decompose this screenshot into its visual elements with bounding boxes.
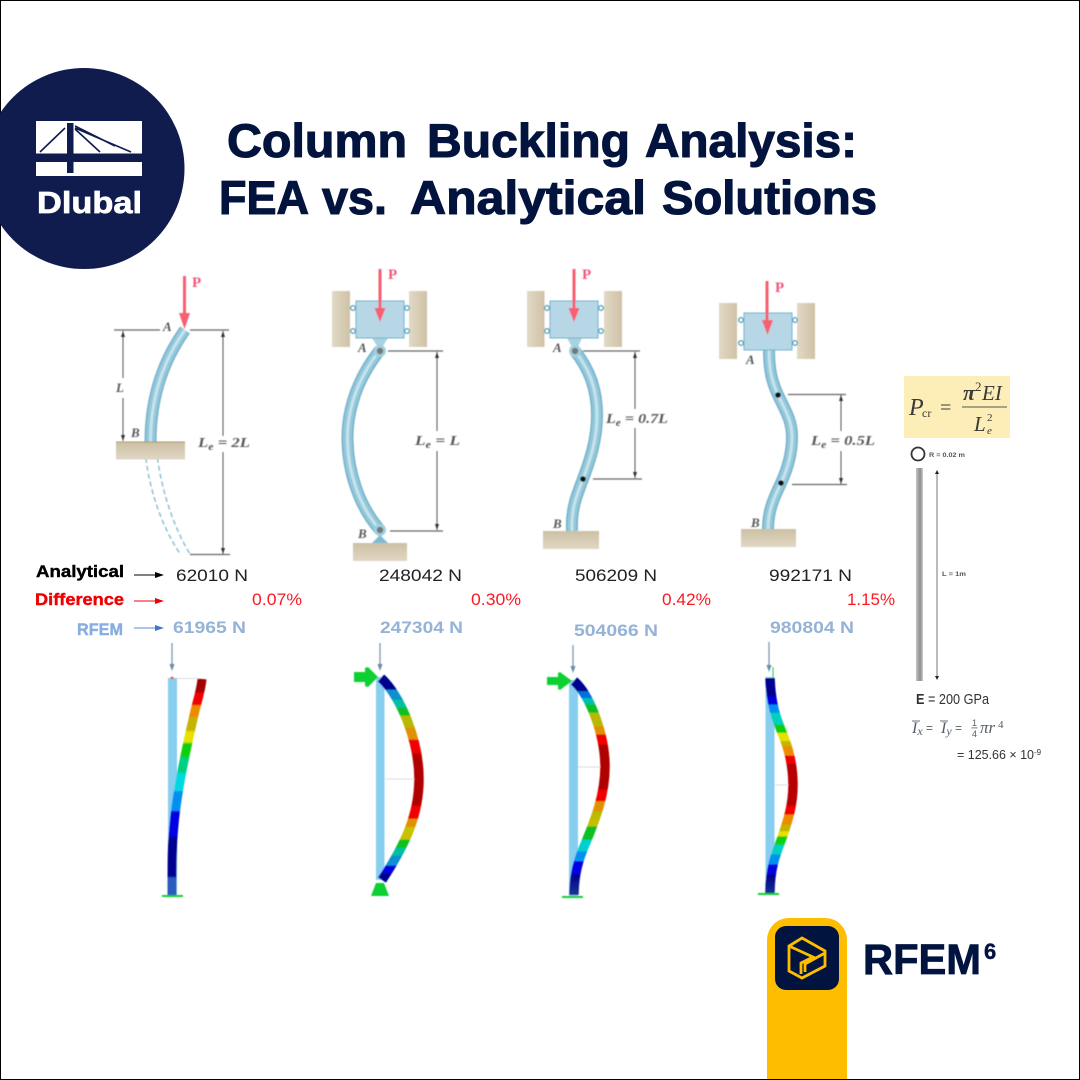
formula box: critical load: EI xyxy=(981,381,1003,405)
formula box: critical load: L xyxy=(973,412,986,436)
column cross-section and length sketch: L = 1m xyxy=(942,571,966,578)
formula box: critical load: 2 xyxy=(987,412,992,424)
diagram: column 3 pinned-fixed, Le = 0.7L: L xyxy=(606,412,615,427)
column cross-section and length sketch xyxy=(912,448,966,681)
diagram: column 4 fixed-fixed, Le = 0.5L: = 0.5L xyxy=(826,434,875,449)
title: vs. xyxy=(322,171,387,224)
diagram: column 2 pinned-pinned, Le = L xyxy=(332,267,460,561)
material properties xyxy=(911,691,1042,762)
diagram: column 1 free-fixed, Le = 2L: = 2L xyxy=(214,436,250,451)
material properties: y xyxy=(945,724,952,738)
material properties: I xyxy=(941,720,946,737)
formula box: critical load: e xyxy=(987,425,992,437)
title: Analysis: xyxy=(645,114,857,167)
row labels with arrows: RFEM xyxy=(77,620,123,639)
RFEM values xyxy=(173,618,854,640)
formula box: critical load: P xyxy=(908,395,924,421)
title xyxy=(219,114,877,224)
analytical values: 62010 N xyxy=(176,566,248,585)
logo: RFEM 6 product tab: 6 xyxy=(984,939,996,964)
material properties: 4 xyxy=(998,719,1004,731)
diagram: column 3 pinned-fixed, Le = 0.7L xyxy=(527,267,668,549)
RFEM values: 504066 N xyxy=(574,621,658,640)
material properties: = xyxy=(926,721,933,735)
difference percentages: 0.30% xyxy=(471,590,521,609)
diagram: column 3 pinned-fixed, Le = 0.7L: B xyxy=(552,516,562,531)
diagram: column 4 fixed-fixed, Le = 0.5L xyxy=(719,280,875,547)
difference percentages xyxy=(252,590,895,609)
title: Solutions xyxy=(662,171,877,224)
diagram: column 2 pinned-pinned, Le = L: L xyxy=(415,434,424,449)
diagram: column 1 free-fixed, Le = 2L: e xyxy=(208,442,214,453)
diagram: column 4 fixed-fixed, Le = 0.5L: A xyxy=(745,352,755,367)
logo: Dlubal badge: Dlubal xyxy=(37,185,142,220)
diagram: column 1 free-fixed, Le = 2L: A xyxy=(162,319,172,334)
diagram: column 1 free-fixed, Le = 2L: B xyxy=(130,425,140,440)
material properties: x xyxy=(916,724,923,738)
analytical values: 248042 N xyxy=(379,566,462,585)
material properties: 4 xyxy=(972,729,977,739)
formula box: critical load: cr xyxy=(922,406,931,420)
analytical values xyxy=(176,566,852,585)
logo: Dlubal badge xyxy=(0,68,184,269)
formula box: critical load: π xyxy=(963,380,976,405)
FEM model: column 1 xyxy=(162,643,202,897)
row labels with arrows: Analytical xyxy=(36,562,124,581)
RFEM values: 247304 N xyxy=(380,618,463,637)
diagram: column 2 pinned-pinned, Le = L: P xyxy=(388,267,397,283)
diagram: column 3 pinned-fixed, Le = 0.7L: e xyxy=(616,418,622,429)
material properties: E = 200 GPa xyxy=(916,691,990,708)
material properties: = 125.66 × 10 xyxy=(957,748,1034,762)
material properties: I xyxy=(912,720,917,737)
row labels with arrows: Difference xyxy=(35,590,124,609)
row labels with arrows xyxy=(35,562,164,639)
title: FEA xyxy=(219,171,309,224)
diagram: column 1 free-fixed, Le = 2L: P xyxy=(192,275,201,291)
diagram: column 1 free-fixed, Le = 2L xyxy=(114,275,250,555)
logo: RFEM 6 product tab xyxy=(767,918,996,1079)
diagram: column 3 pinned-fixed, Le = 0.7L: P xyxy=(582,267,591,283)
logo: RFEM 6 product tab: RFEM xyxy=(863,936,981,984)
diagram: column 4 fixed-fixed, Le = 0.5L: L xyxy=(811,434,820,449)
diagram: column 4 fixed-fixed, Le = 0.5L: e xyxy=(821,440,827,451)
formula box: critical load xyxy=(904,376,1010,438)
formula box: critical load: = xyxy=(940,397,951,419)
title: Column xyxy=(227,114,407,167)
material properties: 1 xyxy=(972,718,977,728)
analytical values: 992171 N xyxy=(769,566,852,585)
diagram: column 1 free-fixed, Le = 2L: L xyxy=(115,380,124,395)
diagram: column 4 fixed-fixed, Le = 0.5L: P xyxy=(775,280,784,296)
difference percentages: 0.07% xyxy=(252,590,302,609)
analytical values: 506209 N xyxy=(575,566,657,585)
FEM model: column 2 xyxy=(354,643,419,896)
RFEM values: 61965 N xyxy=(173,618,246,637)
title: Buckling xyxy=(427,114,630,167)
diagram: column 3 pinned-fixed, Le = 0.7L: A xyxy=(552,340,562,355)
FEM model: column 4 xyxy=(758,642,793,895)
formula box: critical load: 2 xyxy=(975,379,982,394)
diagram: column 2 pinned-pinned, Le = L: e xyxy=(426,440,432,451)
diagram: column 2 pinned-pinned, Le = L: = L xyxy=(431,434,460,449)
diagram: column 3 pinned-fixed, Le = 0.7L: = 0.7L xyxy=(621,412,668,427)
difference percentages: 1.15% xyxy=(847,590,895,609)
diagram: column 2 pinned-pinned, Le = L: A xyxy=(357,340,367,355)
diagram: column 2 pinned-pinned, Le = L: B xyxy=(357,526,367,541)
title: Analytical xyxy=(410,171,646,224)
RFEM values: 980804 N xyxy=(770,618,854,637)
FEM model: column 3 xyxy=(547,645,605,898)
material properties: πr xyxy=(980,718,996,737)
material properties: -9 xyxy=(1034,748,1042,757)
difference percentages: 0.42% xyxy=(662,590,711,609)
diagram: column 4 fixed-fixed, Le = 0.5L: B xyxy=(750,515,760,530)
material properties: = xyxy=(955,721,962,735)
diagram: column 1 free-fixed, Le = 2L: L xyxy=(198,436,207,451)
column cross-section and length sketch: R = 0.02 m xyxy=(929,452,965,459)
